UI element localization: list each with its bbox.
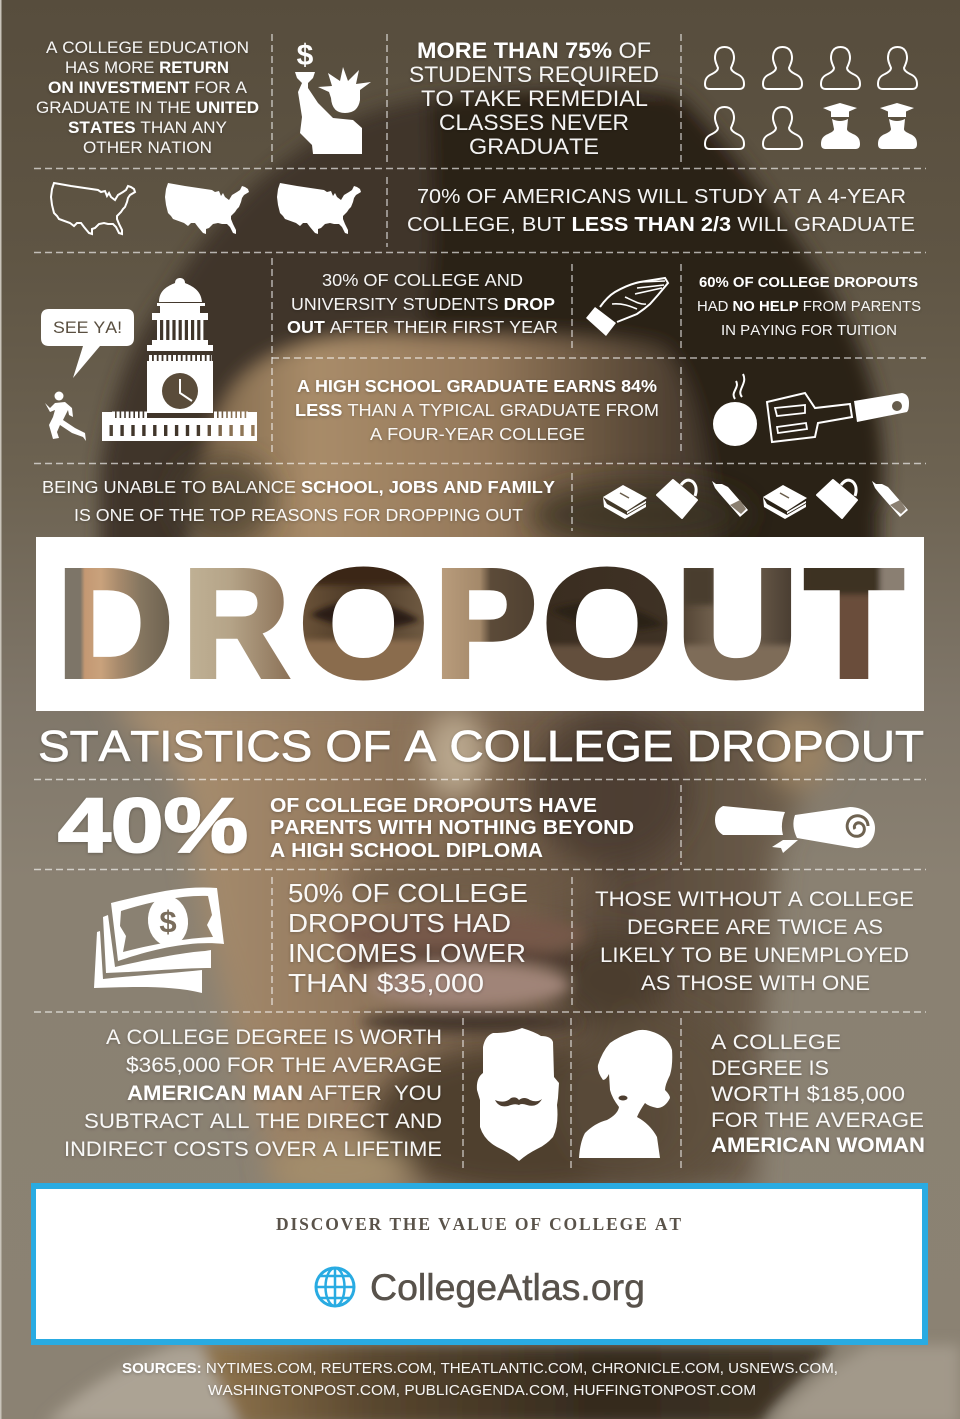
text block: return on investment: HAS MORE RETURN — [65, 59, 229, 77]
text block: degree worth for men: SUBTRACT ALL THE DIRECT AND — [84, 1110, 442, 1133]
text block: more than 75 percent: TO TAKE REMEDIAL — [421, 86, 648, 111]
logo wordmark: CollegeAtlas.org — [370, 1267, 645, 1308]
text block: return on investment: ON INVESTMENT FOR A — [48, 79, 247, 97]
text block: twice as likely unemployed: DEGREE ARE TWICE AS — [627, 916, 883, 939]
icon: eight people, two graduates — [705, 47, 917, 149]
text block: more than 75 percent: GRADUATE — [469, 134, 599, 159]
text block: 50 percent incomes: THAN $35,000 — [288, 968, 484, 998]
text block: degree worth for women: AMERICAN WOMAN — [711, 1134, 925, 1157]
text block: degree worth for men: INDIRECT COSTS OVER A LIFETIME — [64, 1138, 442, 1161]
text block: 30 percent drop out — [287, 270, 558, 337]
text block: 30 percent drop out: 30% OF COLLEGE AND — [322, 270, 523, 290]
text block: parents diploma: PARENTS WITH NOTHING BEYOND — [270, 817, 634, 839]
text block: high school graduate earns — [295, 376, 659, 444]
icon: books, mugs and bottles — [603, 480, 908, 519]
text block: degree worth for women: FOR THE AVERAGE — [711, 1109, 924, 1132]
text block: balancing school jobs family: IS ONE OF THE TOP REASONS FOR DROPPING OUT — [74, 505, 523, 525]
text block: 50 percent incomes: DROPOUTS HAD — [288, 908, 511, 938]
call to action panel — [31, 1183, 928, 1345]
text block: parents diploma: A HIGH SCHOOL DIPLOMA — [270, 840, 543, 862]
text block: parents diploma — [270, 795, 634, 862]
section dividers — [34, 34, 926, 1172]
text block: balancing school jobs family — [42, 477, 555, 525]
text block: return on investment: OTHER NATION — [83, 139, 212, 157]
icon: speech bubble see ya: SEE YA! — [53, 318, 122, 337]
text block: parents diploma: OF COLLEGE DROPOUTS HAVE — [270, 795, 597, 817]
icon: three USA maps — [51, 183, 361, 234]
sources: SOURCES: NYTIMES.COM, REUTERS.COM, THEATLANTIC.COM, CHRONICLE.COM, USNEWS.COM, — [122, 1361, 838, 1377]
big number: 40 percent: 40% — [58, 783, 248, 869]
text block: degree worth for men: A COLLEGE DEGREE IS WORTH — [106, 1026, 442, 1049]
subtitle: STATISTICS OF A COLLEGE DROPOUT — [38, 722, 924, 771]
icon: speech bubble see ya — [41, 309, 134, 378]
text block: twice as likely unemployed — [595, 888, 914, 995]
text block: return on investment: STATES THAN ANY — [68, 119, 227, 137]
text block: more than 75 percent: CLASSES NEVER — [439, 110, 629, 135]
text block: 70 percent study: COLLEGE, BUT LESS THAN 2/3 WILL GRADUATE — [407, 213, 915, 236]
text block: balancing school jobs family: BEING UNABLE TO BALANCE SCHOOL, JOBS AND FAMILY — [42, 477, 555, 497]
text block: degree worth for men: AMERICAN MAN AFTER YOU — [127, 1082, 442, 1105]
text block: return on investment: GRADUATE IN THE UNITED — [36, 99, 259, 117]
text block: high school graduate earns: LESS THAN A TYPICAL GRADUATE FROM — [295, 400, 659, 420]
icon: stack of dollar bills — [94, 887, 224, 993]
text block: degree worth for men: $365,000 FOR THE AVERAGE — [126, 1054, 442, 1077]
text block: twice as likely unemployed: LIKELY TO BE UNEMPLOYED — [600, 944, 909, 967]
text block: degree worth for women: WORTH $185,000 — [711, 1083, 905, 1106]
icon: globe — [316, 1268, 354, 1306]
title banner: DROPOUT — [36, 537, 924, 711]
icon: college clock tower — [102, 278, 257, 441]
text block: 50 percent incomes: INCOMES LOWER — [288, 938, 526, 968]
text block: degree worth for women: A COLLEGE — [711, 1031, 841, 1054]
text block: degree worth for men — [64, 1026, 442, 1161]
icon: stack of dollar bills: $ — [159, 904, 177, 939]
text block: more than 75 percent: MORE THAN 75% OF — [417, 38, 651, 63]
sources — [122, 1361, 838, 1399]
text block: 60 percent no help: HAD NO HELP FROM PARENTS — [697, 299, 921, 315]
text block: 60 percent no help: 60% OF COLLEGE DROPOUTS — [699, 275, 918, 291]
icon: bearded man head — [477, 1028, 559, 1161]
text block: return on investment: A COLLEGE EDUCATION — [46, 39, 249, 57]
icon: pancake with steam and spatula — [713, 374, 909, 446]
text block: twice as likely unemployed: THOSE WITHOUT A COLLEGE — [595, 888, 914, 911]
text block: twice as likely unemployed: AS THOSE WITH ONE — [641, 972, 870, 995]
text block: 60 percent no help — [697, 275, 921, 339]
text block: degree worth for women: DEGREE IS — [711, 1057, 829, 1080]
text block: 70 percent study: 70% OF AMERICANS WILL STUDY AT A 4-YEAR — [417, 185, 906, 208]
text block: high school graduate earns: A FOUR-YEAR COLLEGE — [370, 424, 585, 444]
icon: woman head — [579, 1030, 672, 1158]
sources: WASHINGTONPOST.COM, PUBLICAGENDA.COM, HUFFINGTONPOST.COM — [208, 1383, 756, 1399]
text block: more than 75 percent: STUDENTS REQUIRED — [409, 62, 659, 87]
text block: 30 percent drop out: OUT AFTER THEIR FIRST YEAR — [287, 317, 558, 337]
text block: 70 percent study — [407, 185, 915, 236]
text block: return on investment — [36, 39, 259, 157]
text block: 50 percent incomes: 50% OF COLLEGE — [288, 878, 528, 908]
icon: open hand with cuff — [586, 278, 668, 336]
icon: diploma scroll — [715, 806, 875, 853]
text block: 30 percent drop out: UNIVERSITY STUDENTS DROP — [291, 294, 555, 314]
icon: statue of liberty with dollar sign: $ — [297, 39, 314, 72]
icon: running person — [45, 392, 86, 441]
text block: 50 percent incomes — [288, 878, 528, 998]
text block: high school graduate earns: A HIGH SCHOOL GRADUATE EARNS 84% — [297, 376, 657, 396]
text block: more than 75 percent — [409, 38, 659, 159]
call to action heading: DISCOVER THE VALUE OF COLLEGE AT — [276, 1214, 681, 1234]
text block: 60 percent no help: IN PAYING FOR TUITION — [721, 323, 897, 339]
icon: statue of liberty with dollar sign — [295, 39, 371, 154]
text block: degree worth for women — [711, 1031, 925, 1157]
